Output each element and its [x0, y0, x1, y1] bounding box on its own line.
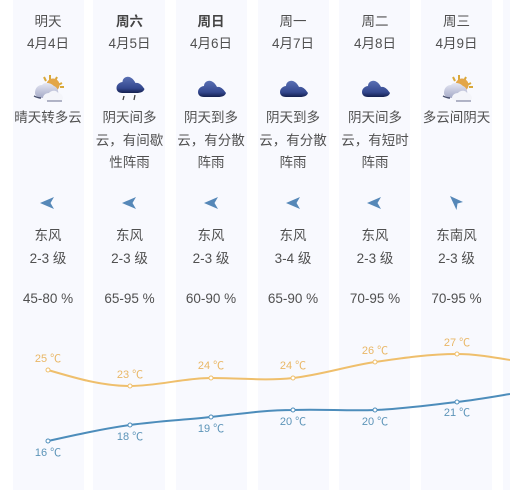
low temperature labels: 16 ℃ [35, 447, 61, 459]
day 6 wind: 2-3 级 [438, 250, 475, 266]
low temperature labels: 18 ℃ [117, 431, 143, 443]
icon: wind arrow day 5 [367, 197, 381, 209]
low temperature line [46, 394, 510, 443]
day 3 wind [193, 228, 229, 266]
day 5 description: 云，有短时 [341, 132, 409, 148]
day 1 description: 晴天转多云 [14, 110, 82, 125]
day 2 description: 云，有间歇 [96, 132, 163, 148]
day 3 description: 阵雨 [198, 155, 224, 170]
day 2 description: 阴天间多 [102, 110, 156, 125]
day 4 humidity: 65-90 % [268, 291, 318, 306]
day 4 wind: 东风 [280, 228, 306, 243]
day 2 date: 4月5日 [108, 36, 151, 51]
day 4 wind [275, 228, 311, 266]
day 6 wind [436, 228, 477, 266]
day 2 weekday: 周六 [116, 14, 143, 29]
day 1 wind: 东风 [34, 228, 62, 243]
low temperature labels: 20 ℃ [362, 416, 388, 428]
day 2 wind: 2-3 级 [111, 250, 148, 266]
day 2 wind: 东风 [116, 228, 143, 243]
icon: wind arrow day 6 southeast [450, 196, 463, 210]
day 1 wind: 2-3 级 [30, 250, 66, 266]
low temperature labels: 20 ℃ [280, 416, 306, 428]
high temperature labels: 23 ℃ [117, 369, 143, 381]
icon: wind arrow day 1 [40, 197, 54, 209]
day 4 date: 4月7日 [272, 36, 314, 51]
day 2 description [96, 110, 163, 170]
icon: sun with clouds day 6 [443, 75, 473, 101]
high temperature labels: 27 ℃ [444, 337, 470, 349]
day 6 date: 4月9日 [435, 36, 478, 51]
day 1 weekday: 明天 [34, 14, 62, 29]
day 5 wind [357, 228, 393, 266]
high temperature labels: 25 ℃ [35, 353, 61, 365]
low temperature labels: 21 ℃ [444, 407, 470, 419]
icon: cloud day 3 [198, 81, 226, 97]
day 4 description: 阵雨 [280, 155, 306, 170]
day 4 wind: 3-4 级 [275, 250, 311, 266]
day 3 weekday: 周日 [198, 14, 224, 29]
high temperature labels [35, 337, 470, 381]
day 3 wind: 东风 [198, 228, 224, 243]
day 4 description [259, 110, 327, 170]
panel: day 1 column [13, 0, 84, 490]
high temperature line [46, 352, 510, 388]
day 5 description: 阴天间多 [348, 110, 402, 125]
panel: day 3 column [176, 0, 247, 490]
icon: sun with clouds day 1 [34, 75, 64, 101]
icon: cloud day 5 [362, 81, 390, 97]
day 5 weekday: 周二 [362, 14, 388, 29]
day 3 description: 阴天到多 [184, 110, 238, 125]
day 3 wind: 2-3 级 [193, 250, 229, 266]
icon: cloud with rain day 2 [116, 77, 144, 100]
day 5 wind: 2-3 级 [357, 250, 393, 266]
panel: day 5 column [339, 0, 410, 490]
day 2 wind [111, 228, 148, 266]
day 5 humidity: 70-95 % [350, 291, 400, 306]
day 5 wind: 东风 [362, 228, 388, 243]
day 3 humidity: 60-90 % [186, 291, 236, 306]
day 1 wind [30, 228, 66, 266]
panel: day 7 partial column [503, 0, 510, 490]
day 2 humidity: 65-95 % [104, 291, 155, 306]
day 1 date: 4月4日 [27, 36, 69, 51]
icon: cloud day 4 [280, 81, 308, 97]
high temperature labels: 26 ℃ [362, 345, 388, 357]
panel: day 2 column [93, 0, 165, 490]
icon: wind arrow day 2 [122, 197, 136, 209]
panel: day 6 column [421, 0, 492, 490]
day 5 description: 阵雨 [362, 155, 388, 170]
day 6 weekday: 周三 [443, 14, 470, 29]
panel: day 4 column [258, 0, 329, 490]
low temperature labels [35, 407, 470, 459]
day 3 date: 4月6日 [190, 36, 232, 51]
day 2 description: 性阵雨 [109, 155, 150, 170]
day 5 date: 4月8日 [354, 36, 396, 51]
day 5 description [341, 110, 409, 170]
low temperature labels: 19 ℃ [198, 423, 224, 435]
day 6 wind: 东南风 [436, 228, 477, 243]
day 3 description [177, 110, 245, 170]
high temperature labels: 24 ℃ [198, 360, 224, 372]
high temperature labels: 24 ℃ [280, 360, 306, 372]
day 3 description: 云，有分散 [177, 132, 245, 148]
day 4 weekday: 周一 [280, 14, 306, 29]
day 4 description: 阴天到多 [266, 110, 320, 125]
icon: wind arrow day 3 [204, 197, 218, 209]
day 6 humidity: 70-95 % [431, 291, 482, 306]
day 4 description: 云，有分散 [259, 132, 327, 148]
icon: wind arrow day 4 [286, 197, 300, 209]
day 6 description: 多云间阴天 [423, 110, 490, 125]
day 1 humidity: 45-80 % [23, 291, 73, 306]
